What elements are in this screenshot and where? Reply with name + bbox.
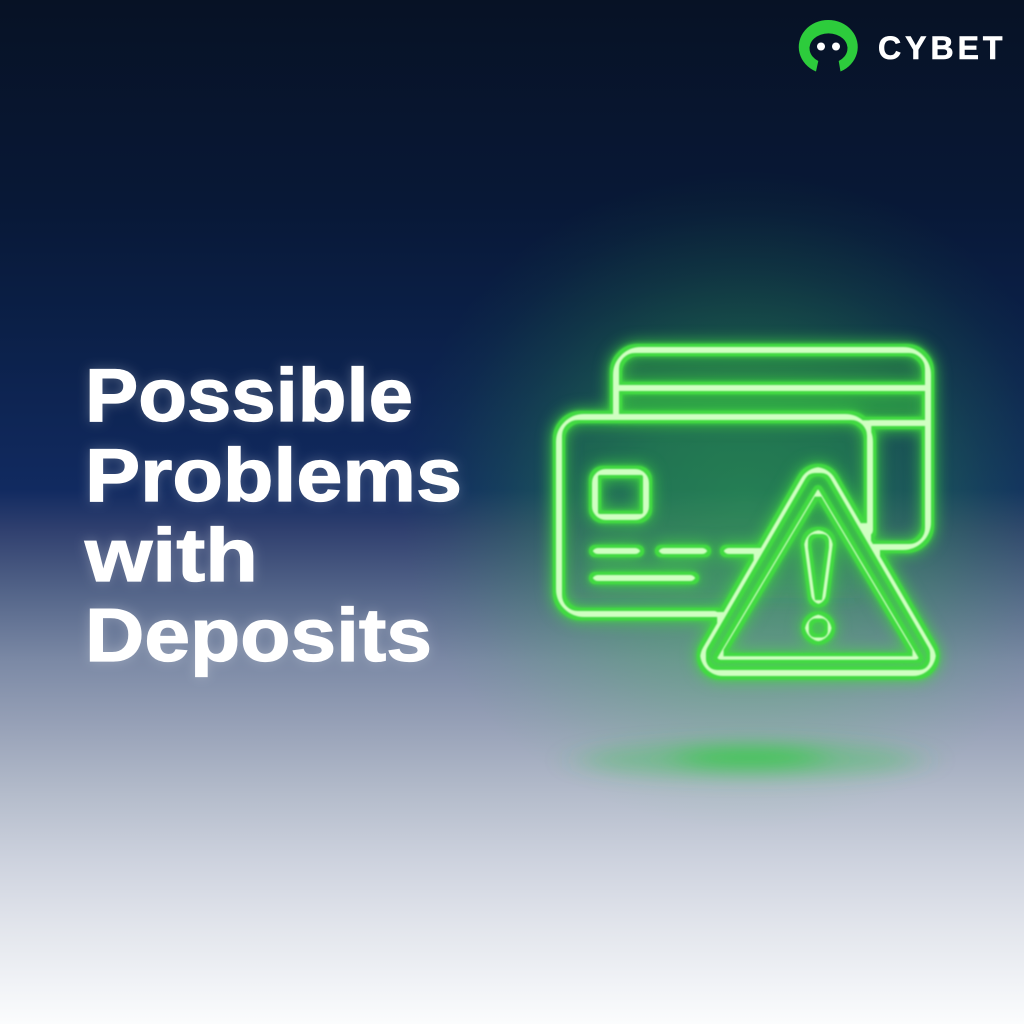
- title line 4: Deposits: [85, 593, 432, 677]
- card chip: [595, 472, 646, 517]
- exclamation mark: [806, 532, 831, 602]
- back card: [616, 350, 928, 547]
- icon: neon credit cards with warning triangle: [559, 350, 933, 673]
- title line 2: Problems: [85, 433, 462, 517]
- title: [84, 353, 462, 677]
- title line 1: Possible: [85, 353, 413, 437]
- warning triangle inner: [718, 490, 918, 658]
- logo wordmark: CYBET: [878, 30, 1006, 66]
- exclamation dot: [807, 616, 830, 640]
- card number lines: [595, 551, 757, 578]
- green halo behind icon: [400, 170, 1024, 830]
- title line 3: with: [84, 513, 258, 597]
- logo eyes: [817, 42, 840, 50]
- warning triangle outer: [703, 470, 933, 673]
- floor glow under icon: [580, 742, 920, 778]
- card interior glow: [570, 358, 922, 598]
- logo: [799, 20, 1006, 72]
- logo mark: [799, 20, 858, 72]
- front card: [559, 417, 870, 614]
